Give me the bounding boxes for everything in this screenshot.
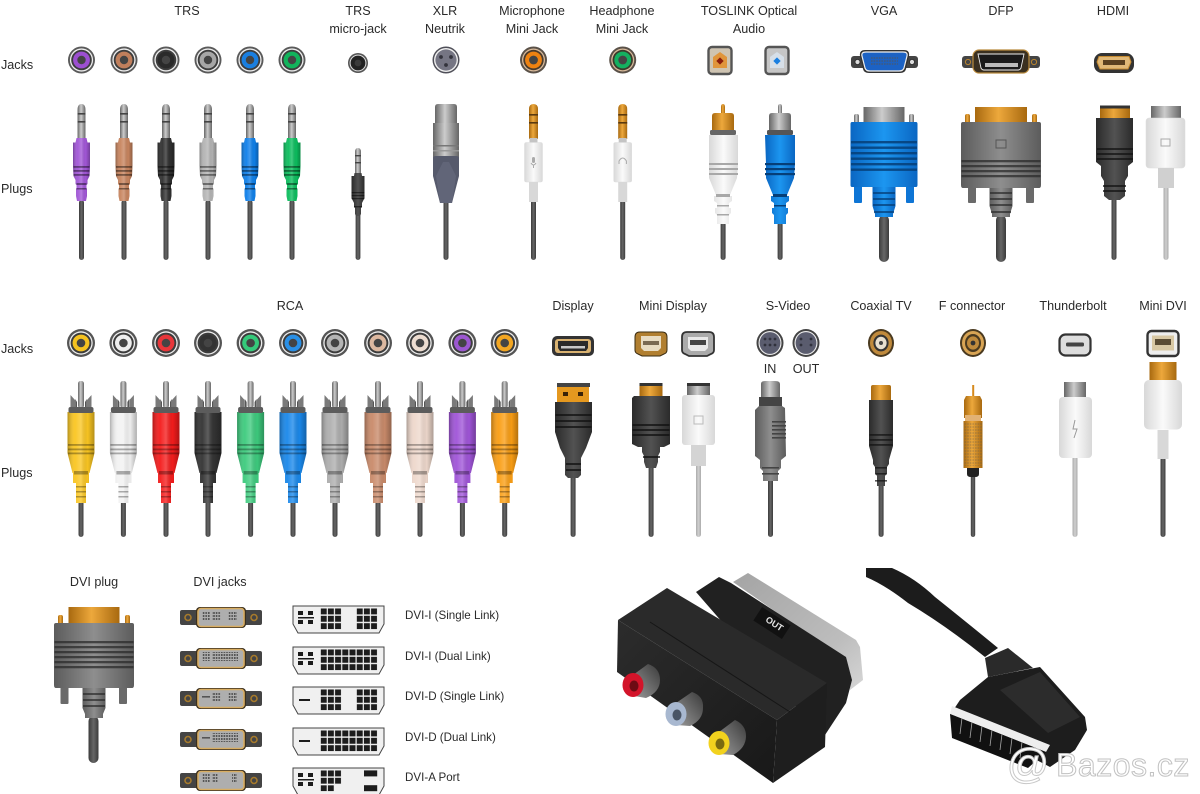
heading: TRS: TRS (174, 4, 200, 18)
heading: DVI jacks: DVI jacks (193, 575, 247, 589)
icon: XLR plug (433, 104, 459, 260)
heading: HDMI: HDMI (1097, 4, 1129, 18)
icon: DVI-I single jack (180, 607, 262, 628)
heading: RCA: RCA (277, 299, 304, 313)
label: OUT: OUT (793, 362, 820, 376)
heading: Mini Display: Mini Display (639, 299, 708, 313)
heading: DVI plug: DVI plug (70, 575, 118, 589)
watermark (1007, 740, 1190, 787)
icon: Mini Display plug black (632, 383, 670, 537)
icon: Display plug (555, 383, 592, 537)
heading: Coaxial TV: Coaxial TV (850, 299, 912, 313)
icon: DFP plug (961, 107, 1041, 262)
panel: DVI jacks (180, 575, 504, 794)
icon: Mini DVI jack (1148, 331, 1178, 356)
icon: TOSLINK jack silver (766, 47, 788, 74)
heading: XLR Neutrik: Neutrik (425, 22, 466, 36)
heading: TOSLINK Optical Audio: Audio (733, 22, 765, 36)
panel: TRS (68, 4, 306, 260)
icon: DVI-D single jack (180, 688, 262, 709)
panel: Headphone Mini Jack (589, 4, 655, 260)
panel: Mini DVI (1139, 299, 1187, 537)
label: DVI-D single: DVI-D (Single Link) (405, 690, 504, 703)
watermark: @ (1007, 740, 1049, 787)
heading: XLR Neutrik: XLR (433, 4, 457, 18)
panel: TRS micro-jack (329, 4, 387, 260)
heading: Mini DVI: Mini DVI (1139, 299, 1187, 313)
icon: VGA jack (851, 50, 918, 73)
icon: Mini DVI plug (1144, 362, 1182, 537)
panel: TOSLINK Optical Audio (701, 4, 797, 260)
heading: Headphone Mini Jack: Mini Jack (596, 22, 649, 36)
panel: VGA (850, 4, 918, 262)
heading: Microphone Mini Jack: Microphone (499, 4, 565, 18)
heading: TRS micro-jack: micro-jack (329, 22, 387, 36)
icon: DVI plug (54, 607, 134, 763)
icon: DFP jack (962, 50, 1040, 73)
icon: HDMI plug black (1096, 106, 1133, 260)
watermark: Bazos.cz (1056, 747, 1190, 783)
panel: Display (552, 299, 594, 537)
RCA sockets on the adapter (622, 664, 746, 755)
icon: Coaxial jack (868, 329, 894, 357)
icon: TOSLINK plug blue (765, 104, 795, 260)
heading: F connector: F connector (939, 299, 1005, 313)
icon: S-Video OUT jack (792, 329, 820, 357)
icon: headphone plug (614, 104, 632, 260)
icon: microphone plug (524, 104, 542, 260)
panel: Mini Display (632, 299, 715, 537)
panel: S-Video (755, 299, 820, 537)
panel: HDMI (1094, 4, 1185, 260)
heading: S-Video: S-Video (766, 299, 810, 313)
row labels: first row plugs: Plugs (1, 182, 33, 196)
row labels: second row plugs: Plugs (1, 466, 33, 480)
label: DVI-D dual: DVI-D (Dual Link) (405, 731, 496, 744)
row labels: second row jacks: Jacks (1, 342, 33, 356)
icon: TRS plugs (73, 104, 300, 260)
icon: Thunderbolt jack (1060, 334, 1090, 356)
photo: SCART to RCA adapter (617, 573, 863, 783)
heading: Display: Display (552, 299, 594, 313)
diagram: DVI-D single pins (293, 687, 384, 714)
icon: S-Video IN jack (756, 329, 784, 357)
icon: Mini Display jack silver (682, 332, 714, 356)
icon: Coaxial plug (869, 385, 893, 537)
icon: TOSLINK jack gold (708, 47, 732, 74)
panel: DVI plug (54, 575, 134, 763)
icon: S-Video plug (755, 381, 786, 537)
photo: SCART cable (866, 568, 1087, 768)
diagram: DVI-I dual pins (293, 647, 384, 674)
icon: headphone jack (609, 46, 636, 74)
icon: F connector jack (960, 329, 986, 357)
icon: Display jack (552, 336, 594, 356)
icon: RCA jacks (67, 329, 519, 357)
diagram: DVI-D dual pins (293, 728, 384, 755)
panel: DFP (961, 4, 1041, 262)
panel: Coaxial TV (850, 299, 912, 537)
heading: VGA: VGA (871, 4, 898, 18)
icon: TRS jacks (68, 46, 306, 74)
heading: Thunderbolt: Thunderbolt (1039, 299, 1107, 313)
icon: HDMI jack (1094, 53, 1134, 73)
label: DVI-I single: DVI-I (Single Link) (405, 609, 499, 622)
icon: RCA plugs (68, 381, 518, 537)
icon: HDMI plug white (1146, 106, 1185, 260)
icon: DVI-A jack (180, 770, 262, 791)
icon: TOSLINK plug white (709, 104, 738, 260)
icon: XLR jack (432, 46, 460, 74)
label: IN: IN (764, 362, 776, 376)
panel: Microphone Mini Jack (499, 4, 565, 260)
row labels: first row jacks: Jacks (1, 58, 33, 72)
icon: DVI-D dual jack (180, 729, 262, 750)
label: DVI-I dual: DVI-I (Dual Link) (405, 650, 491, 663)
icon: Mini Display plug white (682, 383, 715, 537)
icon: Mini Display jack gold (635, 332, 667, 356)
panel: F connector (939, 299, 1005, 537)
heading: DFP: DFP (988, 4, 1014, 18)
icon: microphone jack (520, 46, 547, 74)
icon: micro jack plug (352, 148, 364, 260)
heading: Microphone Mini Jack: Mini Jack (506, 22, 559, 36)
heading: Headphone Mini Jack: Headphone (589, 4, 655, 18)
icon: Thunderbolt plug (1059, 382, 1092, 537)
heading: TOSLINK Optical Audio: TOSLINK Optical (701, 4, 797, 18)
panel: RCA (67, 299, 519, 537)
icon: DVI-I dual jack (180, 648, 262, 669)
panel: XLR Neutrik (425, 4, 466, 260)
icon: micro jack socket (348, 53, 368, 73)
panel: Thunderbolt (1039, 299, 1107, 537)
icon: VGA plug (850, 107, 918, 262)
heading: TRS micro-jack: TRS (345, 4, 371, 18)
photo: SCART to RCA adapter: OUT (764, 614, 786, 633)
label: DVI-A: DVI-A Port (405, 771, 461, 784)
diagram: DVI-A pins (293, 768, 384, 794)
diagram: DVI-I single pins (293, 606, 384, 633)
icon: F connector plug (964, 385, 982, 537)
